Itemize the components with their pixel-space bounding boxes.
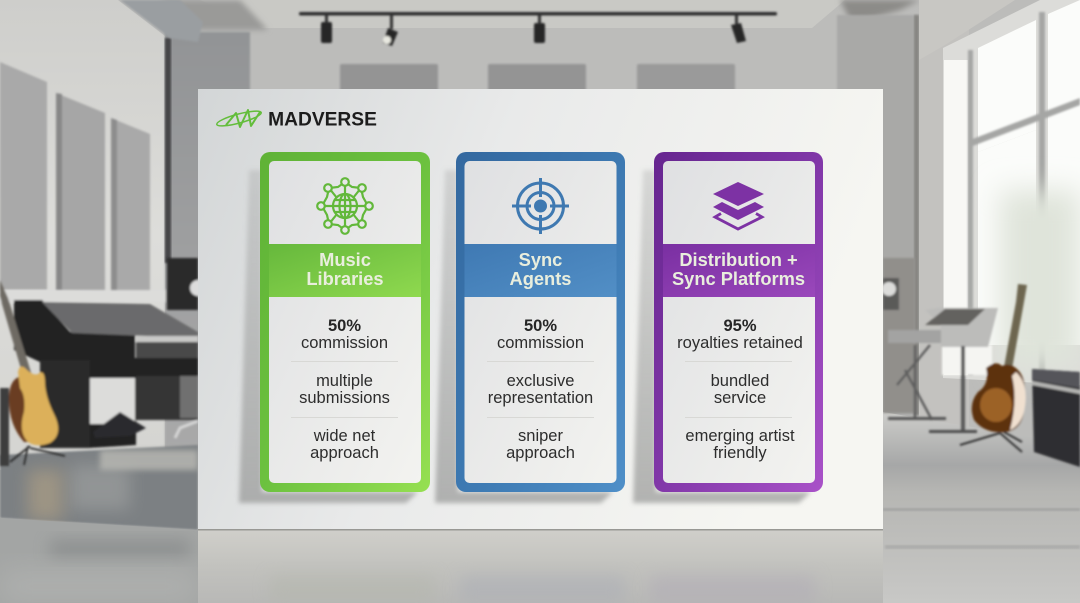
amp — [0, 388, 9, 466]
facts — [487, 317, 594, 462]
right studio gear — [882, 258, 1080, 467]
facts: exclusive — [507, 372, 574, 390]
facts: royalties retained — [677, 334, 803, 352]
icon: layers — [713, 182, 764, 229]
duct — [120, 0, 203, 42]
left wall — [0, 0, 165, 470]
wall panels — [0, 62, 150, 295]
facts: friendly — [713, 444, 767, 462]
facts: approach — [310, 444, 379, 462]
facts: multiple — [316, 372, 373, 390]
facts: 50% — [328, 317, 361, 335]
facts — [291, 317, 398, 462]
panel: Distribution + Sync Platforms — [633, 152, 823, 503]
facts: representation — [488, 389, 593, 407]
band heading — [269, 244, 421, 297]
facts: emerging artist — [685, 427, 795, 445]
mixing desk — [14, 300, 198, 448]
right gray panel and wall — [837, 15, 919, 415]
dark column — [165, 32, 250, 468]
left studio gear — [0, 258, 206, 466]
facts: 95% — [723, 317, 757, 335]
facts: bundled — [711, 372, 769, 390]
facts: submissions — [299, 389, 390, 407]
icon: Madverse waveform — [216, 108, 262, 129]
floor box — [93, 412, 146, 438]
band heading — [464, 244, 616, 297]
back panels — [340, 64, 735, 94]
band heading: Distribution + — [679, 249, 798, 270]
guitar — [1002, 284, 1027, 380]
facts — [677, 317, 803, 462]
logo — [216, 108, 377, 130]
guitar — [0, 280, 65, 465]
band heading — [663, 244, 815, 297]
facts: commission — [301, 334, 388, 352]
icon: target — [512, 178, 569, 234]
track light — [299, 12, 777, 46]
panel: Sync Agents — [435, 152, 625, 503]
facts: commission — [497, 334, 584, 352]
facts: 50% — [524, 317, 557, 335]
facts: service — [714, 389, 766, 407]
facts: approach — [506, 444, 575, 462]
band heading: Agents — [510, 268, 571, 289]
icon: globe network — [317, 178, 373, 234]
chair base — [175, 421, 198, 438]
monitor — [167, 258, 198, 310]
facts: sniper — [518, 427, 563, 445]
window — [943, 0, 1080, 385]
wordmark: MADVERSE — [268, 110, 377, 130]
facts: wide net — [313, 427, 376, 445]
floor — [0, 412, 1080, 603]
board — [198, 89, 883, 530]
panel: Music Libraries — [239, 152, 430, 503]
band heading: Sync — [519, 249, 562, 270]
white shelf strip — [0, 290, 165, 302]
band heading: Music — [319, 249, 371, 270]
ceiling — [200, 0, 845, 28]
band heading: Libraries — [306, 268, 384, 289]
amp — [1032, 369, 1080, 467]
band heading: Sync Platforms — [672, 268, 805, 289]
